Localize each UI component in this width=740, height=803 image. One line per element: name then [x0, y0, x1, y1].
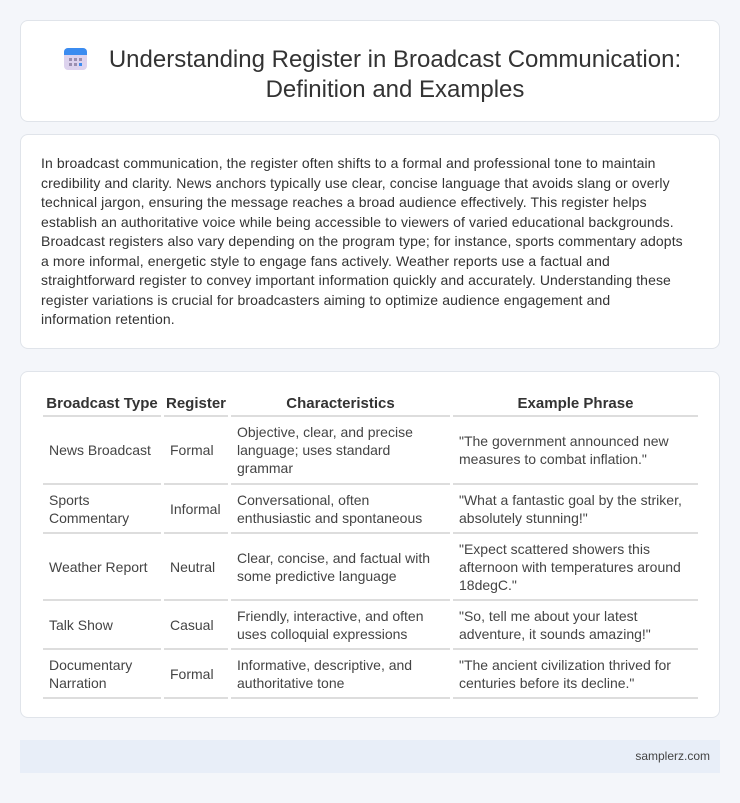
register table: "What a fantastic goal by the striker, absolutely stunning!" — [459, 492, 682, 526]
register table: "So, tell me about your latest adventure, it sounds amazing!" — [459, 608, 651, 642]
register table: Sports Commentary — [49, 492, 129, 526]
register table: Register — [166, 395, 226, 412]
register table: Informal — [170, 500, 221, 516]
intro paragraph card: technical jargon, ensuring the message reaches a broad audience effectively. This register helps — [41, 194, 647, 210]
register table: Talk Show — [49, 616, 113, 632]
register table: Formal — [170, 442, 214, 458]
intro paragraph card: straightforward register to convey important information quickly and accurately. Understanding these — [41, 272, 671, 288]
register table: Broadcast Type — [46, 395, 158, 412]
intro paragraph card: In broadcast communication, the register often shifts to a formal and professional tone to maintain — [41, 155, 656, 171]
register table: Casual — [170, 616, 214, 632]
intro paragraph card: a more informal, energetic style to engage fans actively. Weather reports use a factual and — [41, 252, 610, 268]
table card — [20, 371, 720, 718]
register table: "The government announced new measures to combat inflation." — [459, 433, 669, 467]
intro paragraph card: register variations is crucial for broadcasters aiming to optimize audience engagement and — [41, 292, 610, 308]
icon: calendar — [64, 48, 87, 70]
intro paragraph card: information retention. — [41, 311, 175, 327]
register table: "The ancient civilization thrived for centuries before its decline." — [459, 656, 671, 690]
intro paragraph card: establish an authoritative voice while being accessible to viewers of varied educational backgrounds. — [41, 214, 674, 230]
header card — [20, 20, 720, 122]
register table: Informative, descriptive, and authoritative tone — [237, 656, 412, 690]
intro paragraph card: Broadcast registers also vary depending on the program type; for instance, sports commentary adopts — [41, 233, 683, 249]
register table: Neutral — [170, 558, 215, 574]
register table: Clear, concise, and factual with some predictive language — [237, 550, 430, 584]
register table: Documentary Narration — [49, 656, 132, 690]
register table: Formal — [170, 666, 214, 682]
footer — [20, 740, 720, 773]
register table: Conversational, often enthusiastic and spontaneous — [237, 492, 422, 526]
register table: Friendly, interactive, and often uses colloquial expressions — [237, 608, 424, 642]
title: Understanding Register in Broadcast Communication: Definition and Examples — [109, 46, 681, 103]
register table: News Broadcast — [49, 442, 151, 458]
register table: Weather Report — [49, 558, 148, 574]
intro paragraph card — [20, 134, 720, 349]
intro paragraph card: credibility and clarity. News anchors typically use clear, concise language that avoids slang or overly — [41, 174, 670, 190]
register table: "Expect scattered showers this afternoon with temperatures around 18degC." — [459, 540, 681, 592]
register table: Characteristics — [286, 395, 395, 412]
register table: Example Phrase — [518, 395, 633, 412]
register table: Objective, clear, and precise language; uses standard grammar — [237, 424, 413, 476]
register table — [43, 395, 698, 699]
footer: samplerz.com — [635, 749, 710, 763]
